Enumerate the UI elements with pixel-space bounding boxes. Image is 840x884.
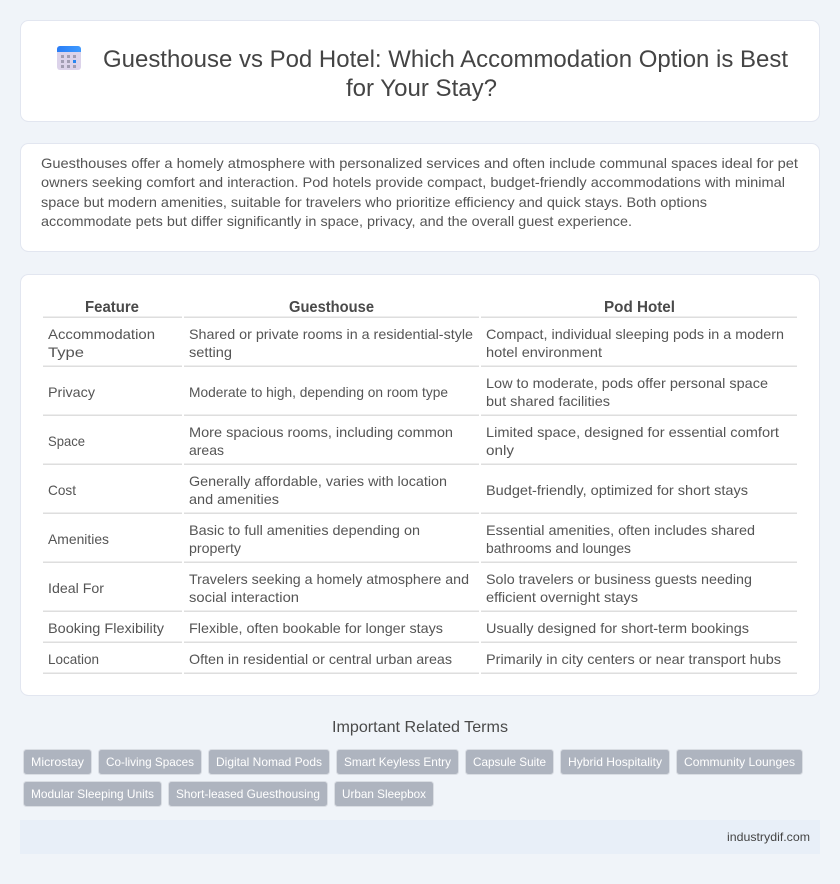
title: for Your Stay? bbox=[346, 75, 497, 102]
chip: Microstay bbox=[24, 750, 92, 774]
row: accommodation type bbox=[48, 326, 784, 360]
row: location: Often in residential or central urban areas bbox=[189, 651, 452, 667]
row: privacy: Low to moderate, pods offer personal space bbox=[486, 375, 768, 391]
row: amenities: property bbox=[189, 540, 241, 556]
icon: calendar bbox=[57, 46, 81, 70]
table row lines bbox=[43, 316, 797, 674]
panel: comparison table bbox=[20, 274, 820, 696]
description text: accommodate pets but differ significantly in space, privacy, and the overall guest experience. bbox=[41, 213, 632, 229]
row: accommodation type: Compact, individual sleeping pods in a modern bbox=[486, 326, 784, 342]
chip: Hybrid Hospitality bbox=[560, 750, 670, 774]
row: amenities bbox=[48, 522, 755, 556]
table header: Guesthouse bbox=[289, 299, 374, 316]
row: ideal for: Travelers seeking a homely atmosphere and bbox=[189, 571, 469, 587]
row: privacy: Privacy bbox=[48, 384, 95, 400]
row: privacy: Moderate to high, depending on room type bbox=[189, 384, 448, 400]
heading: related terms: Important Related Terms bbox=[332, 719, 508, 736]
row: accommodation type: Type bbox=[48, 344, 84, 360]
chip: Hybrid Hospitality: Hybrid Hospitality bbox=[568, 755, 662, 769]
row: location bbox=[48, 651, 781, 667]
chip: Community Lounges bbox=[676, 750, 802, 774]
panel: description bbox=[20, 144, 820, 252]
row: cost: Cost bbox=[48, 482, 76, 498]
row: accommodation type: Accommodation bbox=[48, 326, 155, 342]
description text: owners seeking comfort and interaction. Pod hotels provide compact, budget-friendly accommodations with minimal bbox=[41, 174, 785, 190]
row: amenities: Essential amenities, often includes shared bbox=[486, 522, 755, 538]
chip: Smart Keyless Entry: Smart Keyless Entry bbox=[344, 755, 451, 769]
related term chips bbox=[24, 750, 802, 806]
row: cost: and amenities bbox=[189, 491, 279, 507]
row: space bbox=[48, 424, 779, 458]
row: accommodation type: hotel environment bbox=[486, 344, 602, 360]
chip: Urban Sleepbox: Urban Sleepbox bbox=[342, 787, 426, 801]
chip: Smart Keyless Entry bbox=[336, 750, 458, 774]
table header: Feature bbox=[85, 299, 139, 316]
row: space: Space bbox=[48, 433, 85, 449]
table header: Pod Hotel bbox=[604, 299, 675, 316]
title bbox=[103, 46, 788, 102]
row: cost bbox=[48, 473, 748, 507]
chip: Short-leased Guesthousing bbox=[168, 782, 328, 806]
row: space: Limited space, designed for essential comfort bbox=[486, 424, 779, 440]
row: booking flexibility bbox=[48, 620, 749, 636]
footer bbox=[20, 820, 820, 854]
row: accommodation type: Shared or private rooms in a residential-style bbox=[189, 326, 473, 342]
row: booking flexibility: Booking Flexibility bbox=[48, 620, 164, 636]
row: space: only bbox=[486, 442, 514, 458]
chip: Capsule Suite: Capsule Suite bbox=[473, 755, 546, 769]
chip: Short-leased Guesthousing: Short-leased Guesthousing bbox=[176, 787, 320, 801]
row: ideal for: efficient overnight stays bbox=[486, 589, 638, 605]
chip: Digital Nomad Pods: Digital Nomad Pods bbox=[216, 755, 322, 769]
row: ideal for: social interaction bbox=[189, 589, 299, 605]
table header bbox=[85, 299, 675, 316]
row: cost: Budget-friendly, optimized for short stays bbox=[486, 482, 748, 498]
chip: Modular Sleeping Units: Modular Sleeping Units bbox=[31, 787, 154, 801]
description text: Guesthouses offer a homely atmosphere with personalized services and often include communal spaces ideal for pet bbox=[41, 155, 798, 171]
row: accommodation type: setting bbox=[189, 344, 232, 360]
chip: Urban Sleepbox bbox=[334, 782, 434, 806]
row: space: areas bbox=[189, 442, 224, 458]
panel: header bbox=[20, 20, 820, 122]
chip: Capsule Suite bbox=[466, 750, 554, 774]
description text bbox=[41, 155, 798, 229]
row: amenities: Basic to full amenities depending on bbox=[189, 522, 420, 538]
chip: Community Lounges: Community Lounges bbox=[684, 755, 795, 769]
row: location: Primarily in city centers or near transport hubs bbox=[486, 651, 781, 667]
footer: industrydif.com bbox=[727, 830, 810, 844]
row: ideal for: Solo travelers or business guests needing bbox=[486, 571, 752, 587]
row: space: More spacious rooms, including common bbox=[189, 424, 453, 440]
row: privacy bbox=[48, 375, 768, 409]
row: cost: Generally affordable, varies with location bbox=[189, 473, 447, 489]
title: Guesthouse vs Pod Hotel: Which Accommodation Option is Best bbox=[103, 46, 788, 73]
row: ideal for bbox=[48, 571, 752, 605]
chip: Digital Nomad Pods bbox=[208, 750, 330, 774]
chip: Modular Sleeping Units bbox=[24, 782, 162, 806]
description text: space but modern amenities, suitable for travelers who prioritize efficiency and quick stays. Both options bbox=[41, 194, 707, 210]
row: privacy: but shared facilities bbox=[486, 393, 610, 409]
row: booking flexibility: Flexible, often bookable for longer stays bbox=[189, 620, 443, 636]
row: amenities: Amenities bbox=[48, 531, 109, 547]
chip: Co-living Spaces bbox=[98, 750, 202, 774]
row: amenities: bathrooms and lounges bbox=[486, 540, 631, 556]
row: booking flexibility: Usually designed for short-term bookings bbox=[486, 620, 749, 636]
row: ideal for: Ideal For bbox=[48, 580, 104, 596]
chip: Microstay: Microstay bbox=[31, 755, 84, 769]
chip: Co-living Spaces: Co-living Spaces bbox=[106, 755, 194, 769]
row: location: Location bbox=[48, 651, 99, 667]
